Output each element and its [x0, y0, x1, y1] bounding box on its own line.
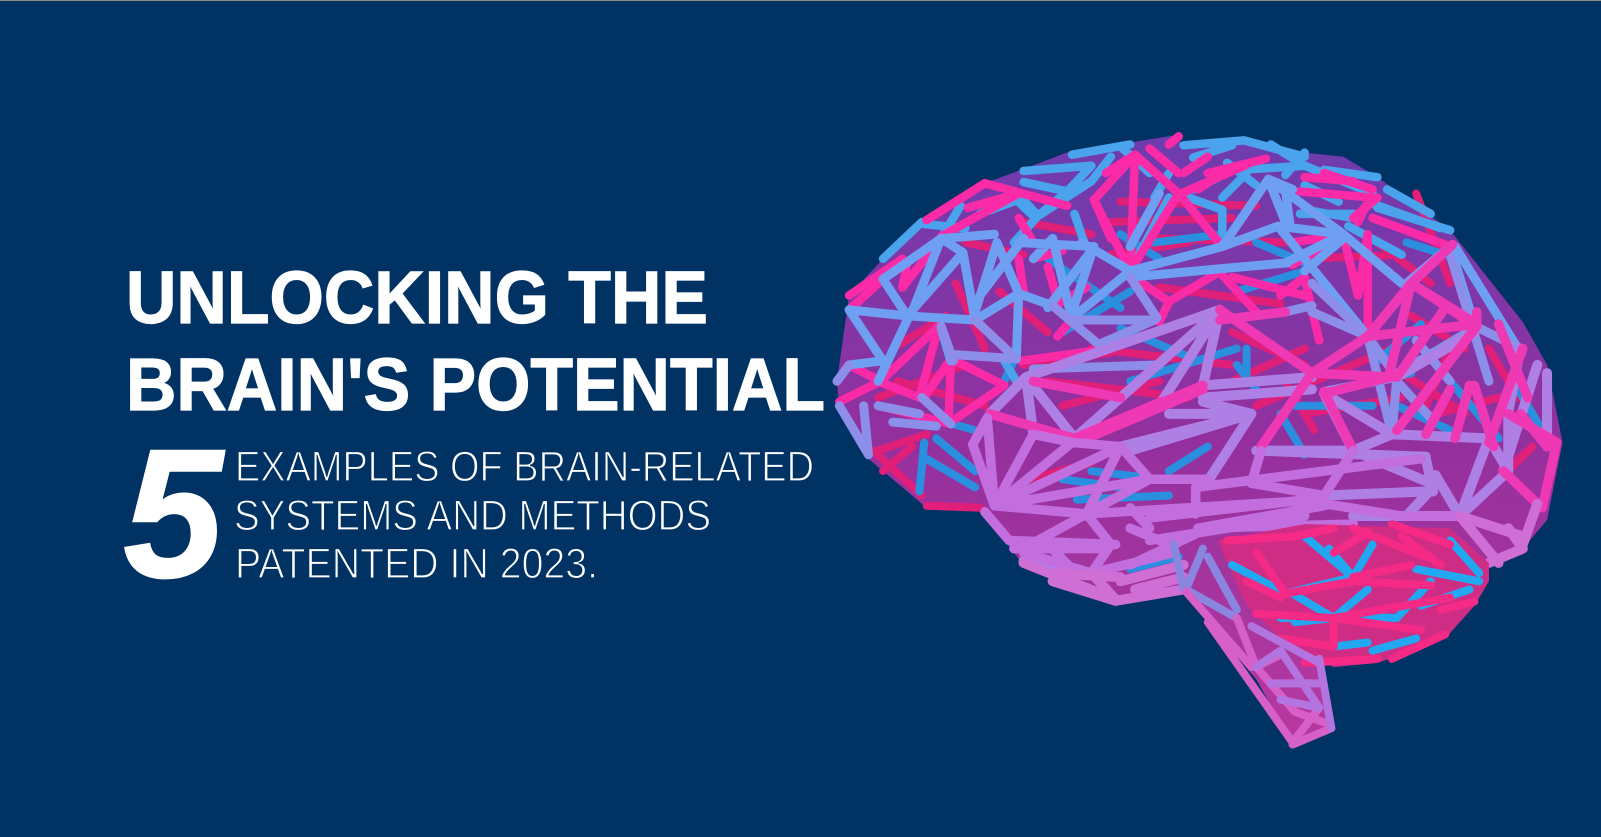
- lower orchid tubes: [973, 418, 1460, 573]
- title: UNLOCKING THE: [126, 256, 708, 339]
- brain illustration: [837, 136, 1563, 745]
- back layer tubes: blue: [919, 234, 1542, 569]
- cerebellum base: [1217, 524, 1489, 667]
- periwinkle tubes: [849, 179, 1518, 381]
- mid blue-violet tubes: [837, 247, 1520, 455]
- subtitle: PATENTED IN 2023.: [235, 540, 598, 588]
- back layer tubes: red: [873, 193, 1533, 508]
- lower purple tubes: [990, 310, 1547, 569]
- base orchid tubes: [1024, 504, 1537, 601]
- big number 5: 5: [123, 410, 226, 616]
- subtitle: [234, 443, 814, 588]
- cerebellum pink tubes: [1227, 524, 1474, 663]
- brain silhouette: [837, 136, 1563, 745]
- magenta tubes, central and right: [990, 245, 1557, 508]
- cerebellum blue tubes: [1232, 536, 1479, 651]
- brain stem: [1174, 545, 1331, 745]
- title: [126, 256, 825, 426]
- top pink tubes: [839, 136, 1450, 424]
- upper blue tubes: [883, 140, 1450, 381]
- subtitle: EXAMPLES OF BRAIN-RELATED: [235, 443, 814, 491]
- subtitle: SYSTEMS AND METHODS: [234, 492, 711, 540]
- title: BRAIN'S POTENTIAL: [126, 343, 825, 426]
